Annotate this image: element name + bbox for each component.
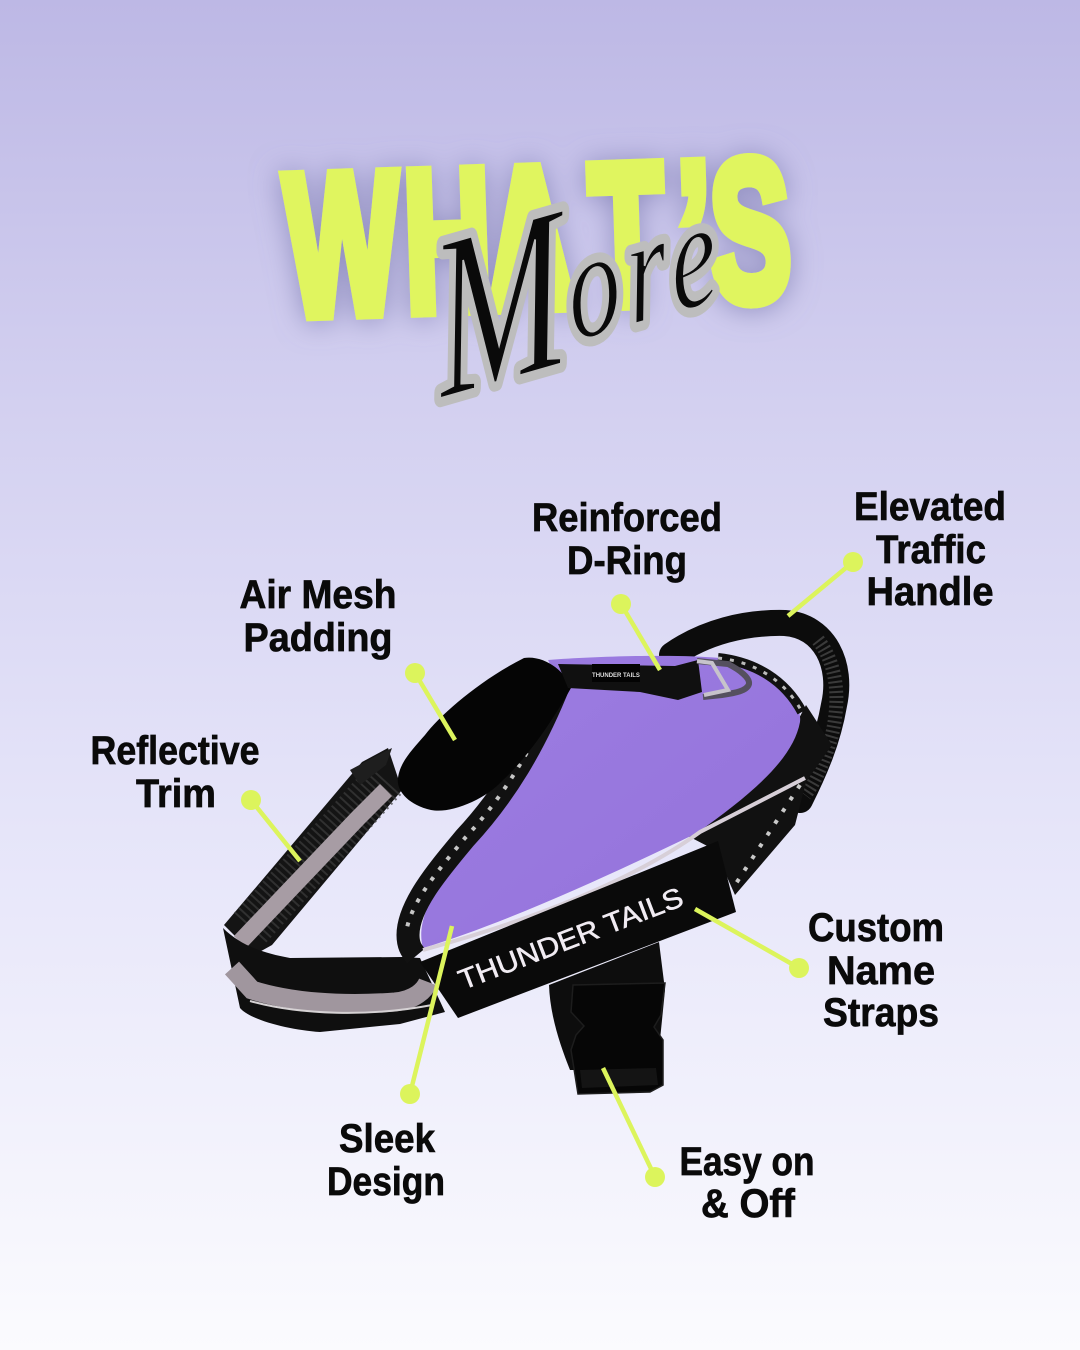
callout: Easy on & Off: Easy on — [680, 1140, 814, 1184]
plastic buckle — [571, 983, 665, 1094]
callout: Easy on & Off: & Off — [701, 1182, 796, 1226]
callout: Sleek Design — [327, 926, 452, 1204]
D-ring — [697, 661, 749, 697]
callout: Elevated Traffic Handle — [788, 485, 1006, 616]
title: More script: M — [418, 157, 585, 448]
traffic handle — [672, 623, 836, 800]
callout: Custom Name Straps: Custom — [808, 906, 944, 950]
chest side panel — [688, 705, 832, 895]
title: More script: ore — [558, 162, 731, 375]
callout: Air Mesh Padding: Air Mesh — [240, 573, 396, 617]
callout: Elevated Traffic Handle: Elevated — [854, 485, 1006, 529]
callout: Air Mesh Padding — [240, 573, 455, 740]
callout: Custom Name Straps: Name — [827, 949, 935, 993]
crotch strap — [549, 942, 665, 1070]
custom name strap — [420, 841, 736, 1018]
title: More script — [418, 114, 735, 448]
callout: Reflective Trim — [90, 729, 300, 861]
callout: Air Mesh Padding: Padding — [244, 616, 392, 660]
callout: Easy on & Off — [603, 1068, 814, 1226]
callout: Sleek Design: Design — [327, 1160, 445, 1204]
body trim with reflective stitching — [408, 682, 560, 956]
callout: Reinforced D-Ring: D-Ring — [567, 539, 687, 583]
purple body panel — [421, 656, 800, 948]
air mesh padding — [398, 658, 571, 811]
title: More script: M — [418, 157, 585, 448]
small logo tag text: THUNDER TAILS — [592, 673, 640, 679]
callout: Reinforced D-Ring: Reinforced — [532, 496, 722, 540]
light edge line — [423, 778, 805, 950]
strap buckle slider — [350, 748, 392, 785]
callout: Custom Name Straps — [695, 906, 944, 1035]
callout: Custom Name Straps: Straps — [823, 991, 939, 1035]
callout: Reflective Trim: Reflective — [90, 729, 260, 773]
title: More script: ore — [558, 162, 731, 375]
callout: Elevated Traffic Handle: Traffic — [876, 528, 986, 572]
title: WHAT'S: WHAT’S — [282, 118, 794, 357]
left neck strap — [224, 748, 402, 955]
name strap text: THUNDER TAILS — [454, 881, 687, 996]
reflective trim on strap — [240, 790, 386, 942]
D-ring strap — [558, 660, 702, 700]
harness product illustration — [223, 623, 836, 1094]
callout: Reflective Trim: Trim — [136, 772, 216, 816]
callout: Reinforced D-Ring — [532, 496, 722, 670]
callout: Elevated Traffic Handle: Handle — [866, 570, 994, 614]
callout: Sleek Design: Sleek — [339, 1117, 436, 1161]
lower strap — [223, 928, 445, 1032]
